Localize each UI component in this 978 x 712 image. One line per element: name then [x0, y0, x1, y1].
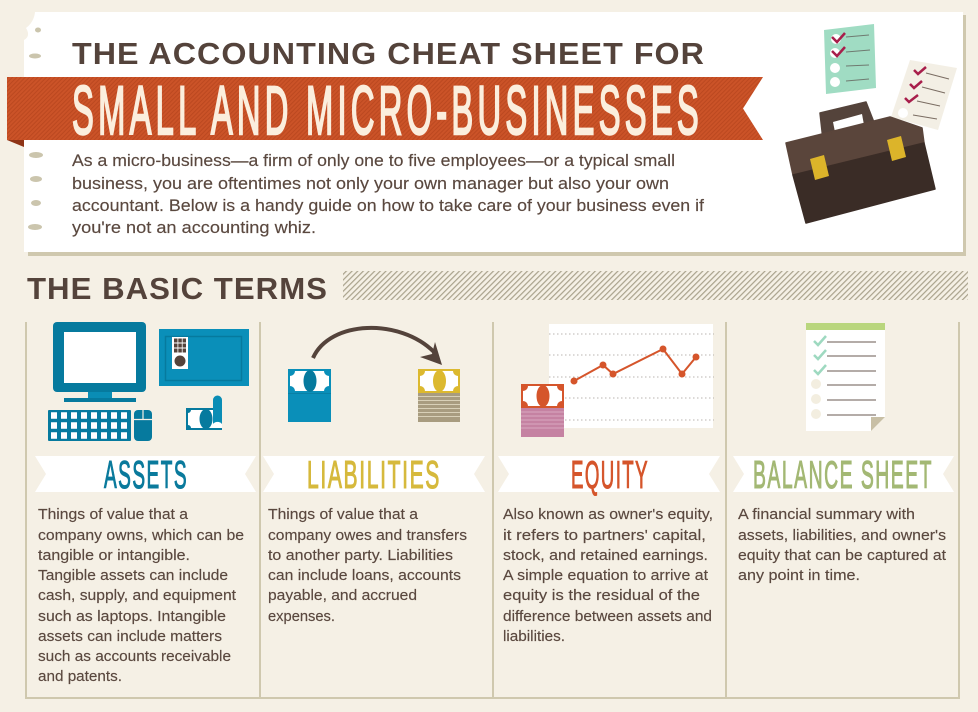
icon: blue cash stack [288, 369, 331, 422]
icon: yellow cash stack [418, 369, 460, 422]
text: liabilities definition: payable, and accrued [268, 588, 417, 604]
banner: equity [498, 456, 720, 492]
panel: assets: ASSETS [104, 454, 188, 497]
icon: computer [48, 322, 152, 441]
text: liabilities definition [268, 507, 467, 625]
text: assets definition: such as accounts receivable [38, 649, 231, 665]
text: equity definition: liabilities. [503, 629, 565, 645]
text: equity definition: stock, and retained earnings. [503, 548, 708, 564]
intro text: business, you are oftentimes not only your own manager but also your own [72, 174, 669, 193]
panel: liabilities [263, 328, 485, 625]
label: liabilities: LIABILITIES [307, 454, 441, 497]
arrow: transfer [313, 328, 442, 365]
banner: liabilities [263, 456, 485, 492]
intro text: you're not an accounting whiz. [72, 218, 316, 237]
icon: safe [159, 329, 249, 386]
text: equity definition: difference between assets and [503, 609, 712, 625]
text: assets definition: cash, supply, and equipment [38, 588, 236, 604]
text: assets definition [38, 507, 244, 685]
panel: equity: EQUITY [571, 454, 649, 497]
heading: the basic terms: THE BASIC TERMS [27, 271, 328, 306]
text: balance sheet definition: any point in time. [738, 568, 860, 584]
icon: balance sheet document [806, 323, 885, 431]
intro text: accountant. Below is a handy guide on how to take care of your business even if [72, 196, 704, 215]
icon: mint checklist [824, 24, 876, 94]
text: liabilities definition: to another party. Liabilities [268, 548, 453, 564]
text: assets definition: such as laptops. Intangible [38, 609, 226, 625]
text: assets definition: assets can include matters [38, 629, 222, 645]
text: balance sheet definition: A financial summary with [738, 507, 915, 523]
icon: rolled cash [186, 396, 222, 430]
hatched heading rule [343, 271, 968, 300]
banner: assets [35, 456, 256, 492]
title line one: THE ACCOUNTING CHEAT SHEET FOR [72, 36, 705, 71]
intro text: As a micro-business—a firm of only one to five employees—or a typical small [72, 151, 675, 170]
icon: white checklist [891, 60, 957, 130]
ribbon banner [7, 77, 763, 147]
text: equity definition: equity is the residual of the [503, 588, 700, 604]
text: liabilities definition: expenses. [268, 609, 335, 625]
text: equity definition: Also known as owner's equity, [503, 507, 713, 523]
panel: balance sheet [733, 323, 954, 584]
text: equity definition [503, 507, 713, 645]
text: assets definition: tangible or intangible. [38, 548, 190, 564]
text: liabilities definition: Things of value that a [268, 507, 418, 523]
text: assets definition: Tangible assets can include [38, 568, 228, 584]
text: balance sheet definition: assets, liabilities, and owner's [738, 528, 946, 544]
columns frame [26, 322, 959, 698]
text: liabilities definition: company owes and transfers [268, 528, 467, 544]
text: equity definition: A simple equation to arrive at [503, 568, 708, 584]
text: equity definition: it refers to partners' capital, [503, 528, 706, 544]
text: assets definition: company owns, which can be [38, 528, 244, 544]
icon: orange cash stack [521, 384, 564, 437]
text: balance sheet definition: equity that can be captured at [738, 548, 946, 564]
text: balance sheet definition [738, 507, 946, 584]
text: assets definition: Things of value that a [38, 507, 188, 523]
panel: assets [35, 322, 256, 685]
intro text [72, 151, 704, 237]
header paper panel [24, 12, 966, 256]
icon: briefcase [786, 102, 935, 223]
text: liabilities definition: can include loans, accounts [268, 568, 461, 584]
text: assets definition: and patents. [38, 669, 122, 685]
banner: balance sheet [733, 456, 954, 492]
chart: rising line [549, 324, 714, 428]
panel: equity [498, 324, 720, 645]
